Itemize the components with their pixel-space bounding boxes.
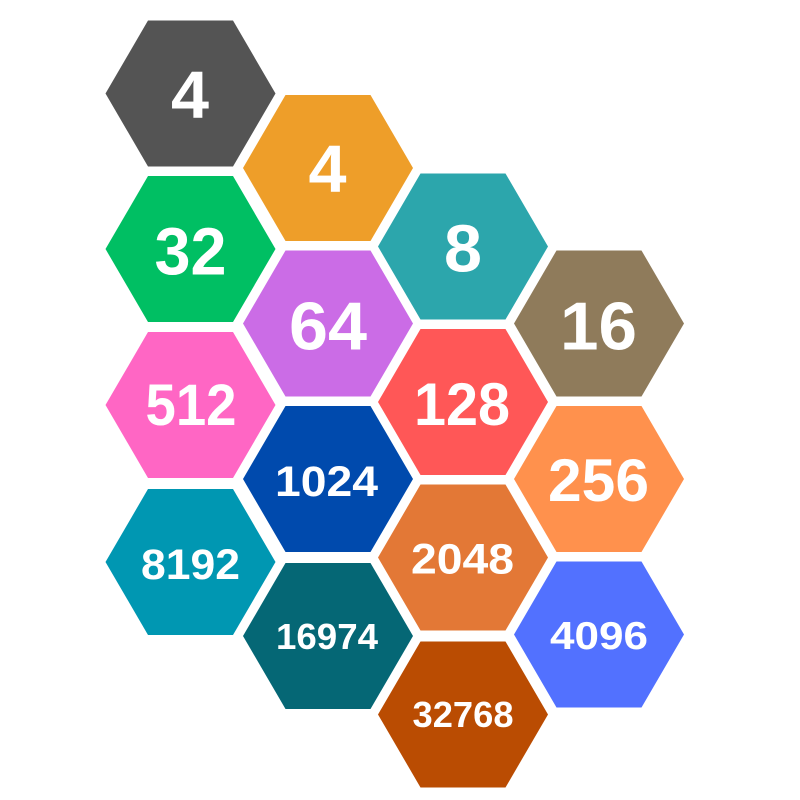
hexagon: 1024 blue: 1024 <box>275 458 378 506</box>
hexagon: 16 brown: 16 <box>560 288 637 364</box>
hexagon: 128 red: 128 <box>414 371 510 438</box>
hexagon: 32 green <box>106 176 276 322</box>
hexagon: 32 green: 32 <box>154 214 226 290</box>
hexagon: 64 purple <box>243 250 413 396</box>
hexagon: 8 teal: 8 <box>444 212 482 286</box>
hexagon: 16 brown <box>514 250 684 396</box>
hexagon: 4 orange: 4 <box>308 132 346 207</box>
hexagon: 4096 periwinkle <box>514 562 684 708</box>
hexagon: 32768 rust: 32768 <box>413 694 513 735</box>
hexagon: 2048 burnt orange: 2048 <box>411 536 514 584</box>
hexagon: 4 orange <box>243 95 413 241</box>
hexagon: 1024 blue <box>243 406 413 552</box>
hexagon: 512 pink: 512 <box>146 373 236 438</box>
hexagon: 256 light orange: 256 <box>548 447 649 514</box>
hexagon: 4 dark grey: 4 <box>171 58 209 133</box>
hexagon: 2048 burnt orange <box>378 484 548 630</box>
hexagon: 16974 dark teal <box>243 563 413 709</box>
hexagon: 4096 periwinkle: 4096 <box>550 615 648 658</box>
hexagon: 8192 cyan: 8192 <box>141 541 240 589</box>
hexagon: 16974 dark teal: 16974 <box>276 616 378 657</box>
hexagon: 256 light orange <box>514 406 684 552</box>
hexagon: 4 dark grey <box>106 20 276 166</box>
hexagon: 8 teal <box>378 174 548 320</box>
hexagon: 8192 cyan <box>106 489 276 635</box>
hexagon: 64 purple: 64 <box>289 288 367 364</box>
hexagon: 512 pink <box>106 332 276 478</box>
hexagon: 32768 rust <box>378 642 548 788</box>
hexagon: 128 red <box>378 329 548 475</box>
